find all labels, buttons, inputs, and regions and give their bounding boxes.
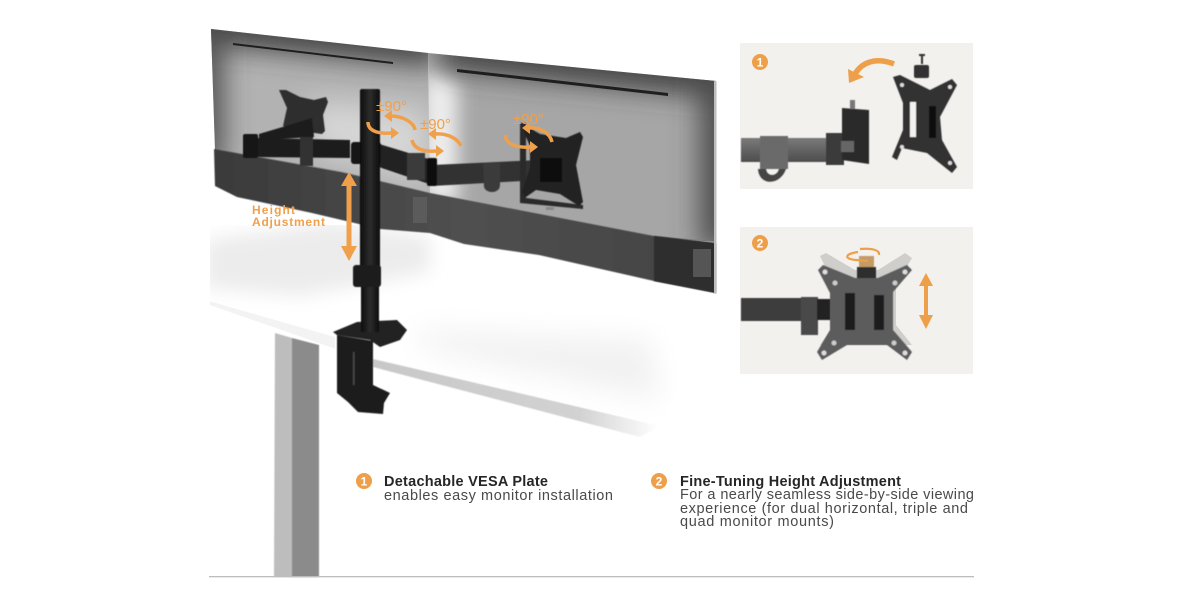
panel 1 curved arrow — [848, 61, 894, 83]
desk leg — [274, 333, 319, 577]
baseline rule — [209, 576, 974, 577]
cable clip — [413, 197, 427, 223]
panel 1 arm — [741, 100, 869, 182]
height adjustment label: Height — [252, 203, 295, 217]
panel 2 arm — [741, 297, 831, 335]
feature 2 description: quad monitor mounts) — [680, 514, 834, 530]
lower dark band — [214, 149, 716, 293]
right arm first segment — [376, 143, 432, 185]
left sleeve — [300, 137, 313, 166]
left arm bar — [255, 138, 350, 158]
left monitor back — [211, 29, 430, 194]
panel 1: detachable VESA plate — [740, 43, 973, 189]
monitor arm assembly — [243, 89, 583, 414]
panel 2 VESA plate — [817, 265, 912, 360]
panel 2 rotation arrow — [847, 249, 879, 261]
pole upper — [360, 89, 380, 269]
rotation arrowheads — [384, 110, 538, 157]
feature 2 badge: 2 — [656, 474, 663, 488]
pole lower — [361, 268, 379, 332]
feature 2 — [651, 473, 974, 530]
desk surface — [205, 222, 660, 400]
right hinge — [427, 158, 437, 186]
right sleeve — [483, 163, 500, 192]
feature 1 badge: 1 — [361, 474, 368, 488]
panel 2 vertical arrow — [919, 273, 933, 329]
left VESA plate — [279, 90, 328, 134]
panel 1 VESA plate — [892, 75, 957, 173]
feature 2 heading: Fine-Tuning Height Adjustment — [680, 474, 901, 490]
feature 1 description: enables easy monitor installation — [384, 488, 613, 504]
feature 2 badge — [651, 473, 667, 489]
panel 1 number badge — [752, 54, 768, 70]
rotation labels: ±90° — [420, 116, 451, 133]
right monitor back — [428, 53, 716, 242]
right VESA plate backing — [520, 123, 583, 209]
panel 2 number badge: 2 — [757, 236, 764, 250]
feature 1 badge — [356, 473, 372, 489]
pole connector — [351, 142, 381, 164]
rotation labels: ±90° — [376, 98, 407, 115]
left top slot — [233, 43, 393, 64]
height collar — [353, 265, 381, 287]
panel 2: fine tuning height — [740, 227, 973, 374]
rotation labels — [376, 98, 544, 133]
clamp body — [337, 335, 390, 414]
left bracket — [259, 118, 314, 140]
panel 2 knob — [857, 256, 876, 281]
height adjustment arrow — [341, 172, 357, 261]
feature 1 — [356, 473, 613, 504]
feature 1 heading: Detachable VESA Plate — [384, 474, 548, 490]
panel 1 knob and screw — [914, 54, 929, 78]
panel 2 ghost plate — [820, 253, 912, 345]
clamp base plate — [333, 320, 407, 347]
panel 1 number badge: 1 — [757, 56, 764, 70]
feature 2 description: experience (for dual horizontal, triple and — [680, 501, 968, 517]
right top slot — [457, 69, 668, 96]
desk underside shadow — [373, 359, 660, 437]
height adjustment label: Adjustment — [252, 215, 325, 229]
dual monitors rear view — [211, 29, 717, 294]
rotation labels: ±90° — [513, 111, 544, 128]
right port cover — [693, 249, 711, 277]
right arm second segment — [432, 160, 540, 186]
right VESA plate — [522, 126, 583, 206]
feature 2 description: For a nearly seamless side-by-side viewing — [680, 487, 974, 503]
panel 2 number badge — [752, 235, 768, 251]
rotation arrows — [368, 116, 552, 151]
left hinge — [243, 134, 258, 158]
